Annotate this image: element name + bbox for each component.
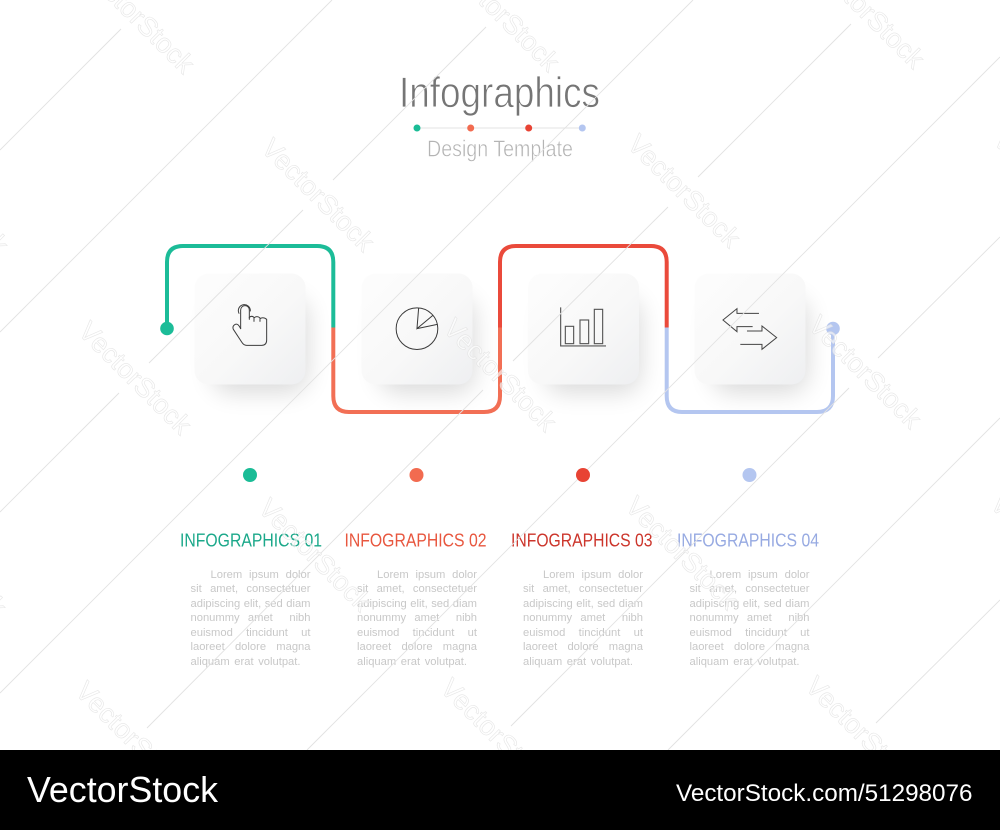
body text 3: euismod tincidunt ut <box>523 627 643 639</box>
heading 01: INFOGRAPHICS 01 <box>180 530 322 550</box>
watermarks: VectorStock <box>70 676 195 801</box>
connector: lavender segment <box>667 322 840 412</box>
connector: orange segment <box>333 328 500 412</box>
body text 2 <box>357 569 477 668</box>
body text 1: laoreet dolore magna <box>190 641 310 653</box>
connector: red segment <box>500 246 667 328</box>
body text 4: euismod tincidunt ut <box>690 627 810 639</box>
card 4 <box>694 274 808 393</box>
body text 3: laoreet dolore magna <box>523 641 643 653</box>
watermarks: VectorStock <box>800 671 925 796</box>
body text 2: nonummy amet nibh <box>357 612 477 624</box>
body text 2: aliquam erat volutpat. <box>357 656 467 668</box>
body text 4: laoreet dolore magna <box>690 641 810 653</box>
icon: bar chart <box>561 307 606 346</box>
heading 04: INFOGRAPHICS 04 <box>677 530 819 550</box>
card 1 <box>194 274 308 393</box>
body text 2: euismod tincidunt ut <box>357 627 477 639</box>
body text 1: sit amet, consectetuer <box>190 583 310 595</box>
body text 2: sit amet, consectetuer <box>357 583 477 595</box>
body text 1 <box>190 569 310 668</box>
body text 1: Lorem ipsum dolor <box>210 569 310 581</box>
step marker 3 <box>576 468 590 482</box>
subtitle: Design Template <box>427 136 573 162</box>
body text 1: aliquam erat volutpat. <box>190 656 300 668</box>
step marker 1 <box>243 468 257 482</box>
body text 2: laoreet dolore magna <box>357 641 477 653</box>
body text 2: adipiscing elit, sed diam <box>357 598 477 610</box>
body text 3: adipiscing elit, sed diam <box>523 598 643 610</box>
body text 3: nonummy amet nibh <box>523 612 643 624</box>
body text 4: nonummy amet nibh <box>690 612 810 624</box>
icon: pointing hand <box>233 305 267 345</box>
footer logo text: VectorStock <box>27 769 219 810</box>
watermarks: VectorStock <box>803 310 928 435</box>
body text 1: euismod tincidunt ut <box>190 627 310 639</box>
body text 4: Lorem ipsum dolor <box>710 569 810 581</box>
title: Infographics <box>399 69 600 117</box>
watermarks: VectorStock <box>73 316 198 441</box>
watermarks: VectorStock <box>435 673 560 798</box>
watermarks: VectorStock <box>620 491 745 616</box>
connector: green segment <box>160 246 333 335</box>
body text 4 <box>690 569 810 668</box>
icon: exchange arrows <box>723 309 777 349</box>
title divider with four dots <box>414 124 586 132</box>
body text 4: adipiscing elit, sed diam <box>690 598 810 610</box>
body text 3: sit amet, consectetuer <box>523 583 643 595</box>
step marker 4 <box>742 468 756 482</box>
footer url text: VectorStock.com/51298076 <box>676 780 972 807</box>
watermarks: VectorStock <box>622 129 747 254</box>
step marker 2 <box>410 468 424 482</box>
footer bar <box>0 750 1000 830</box>
watermarks: VectorStock <box>438 313 563 438</box>
heading 03: INFOGRAPHICS 03 <box>511 530 652 550</box>
card 3 <box>528 274 641 393</box>
body text 1: adipiscing elit, sed diam <box>190 598 310 610</box>
body text 3: Lorem ipsum dolor <box>543 569 643 581</box>
body text 2: Lorem ipsum dolor <box>377 569 477 581</box>
watermarks: VectorStock <box>253 493 378 618</box>
body text 4: aliquam erat volutpat. <box>690 656 800 668</box>
body text 3: aliquam erat volutpat. <box>523 656 633 668</box>
body text 4: sit amet, consectetuer <box>690 583 810 595</box>
watermarks: VectorStock <box>256 133 381 258</box>
body text 1: nonummy amet nibh <box>190 612 310 624</box>
heading 02: INFOGRAPHICS 02 <box>344 530 486 550</box>
body text 3 <box>523 569 643 668</box>
icon: pie chart <box>396 308 438 349</box>
card 2 <box>362 274 475 393</box>
